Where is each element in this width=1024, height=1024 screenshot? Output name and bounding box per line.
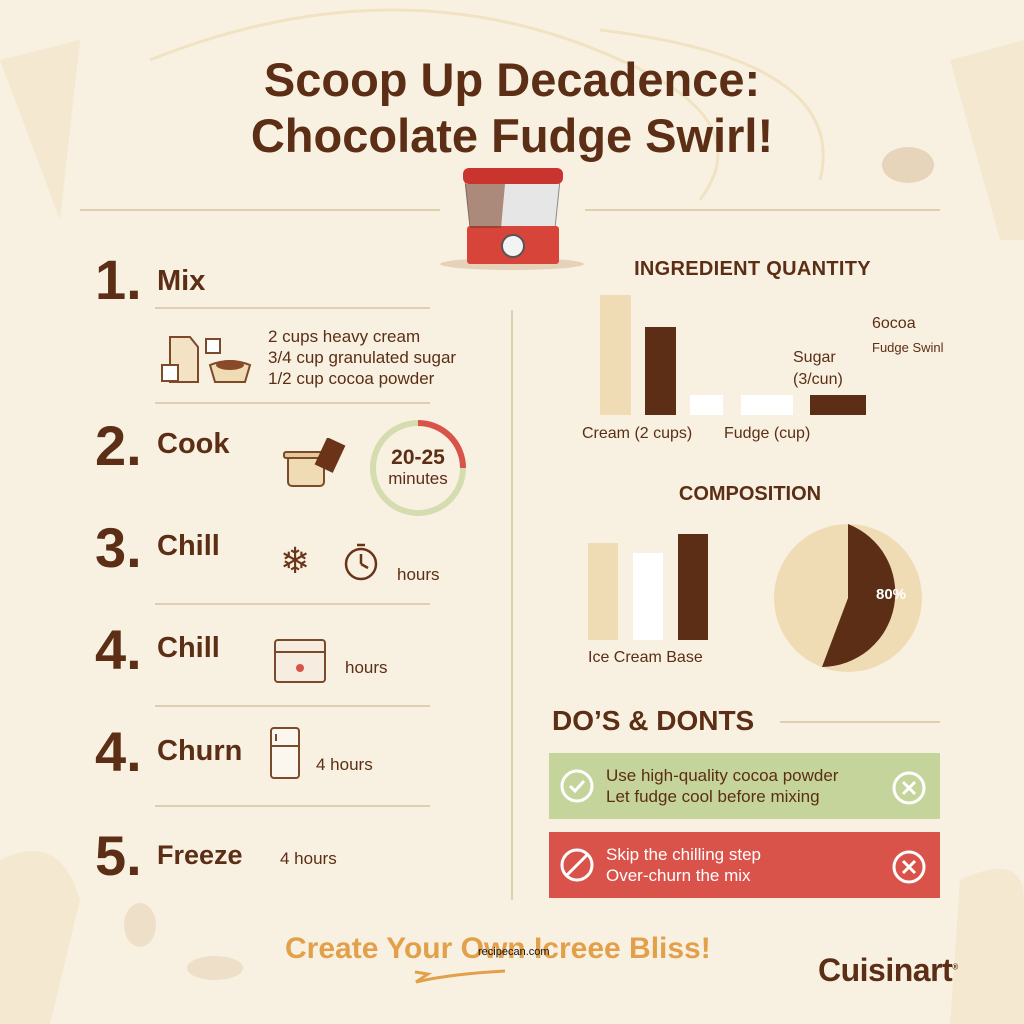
footer tagline: Create Your Own Icreee Bliss!: [285, 932, 711, 965]
title: [251, 53, 773, 162]
step 4 churn: 4 hours: [316, 755, 373, 774]
step 3 chill: [95, 516, 440, 584]
title: Scoop Up Decadence:: [264, 53, 760, 106]
step 2 cook: minutes: [388, 469, 448, 488]
composition chart: Ice Cream Base: [588, 649, 703, 666]
dont box: Skip the chilling step: [606, 845, 761, 864]
step 4 churn: Churn: [157, 735, 242, 767]
bar chart: ingredient quantity: Fudge Swinl: [872, 340, 944, 355]
text: recipecan.com: [478, 946, 550, 958]
bar chart: ingredient quantity: 6ocoa: [872, 315, 916, 332]
icon: ice cream maker: [440, 168, 584, 270]
icon: pot: [283, 438, 346, 487]
dos and donts heading: DO’S & DONTS: [552, 705, 754, 736]
step 1 mix: 1.: [95, 248, 142, 311]
pie chart: [774, 524, 922, 672]
step 5 freeze: [95, 824, 337, 887]
step 4 chill: Chill: [157, 632, 220, 664]
step 3 chill: Chill: [157, 530, 220, 562]
step 5 freeze: Freeze: [157, 840, 243, 870]
composition chart: COMPOSITION: [679, 483, 821, 505]
dont box: Over-churn the mix: [606, 866, 751, 885]
step 1 mix: 2 cups heavy cream: [268, 327, 420, 346]
do box: Use high-quality cocoa powder: [606, 766, 838, 785]
dont box: [549, 832, 940, 898]
step 5 freeze: 4 hours: [280, 849, 337, 868]
step 1 mix: Mix: [157, 265, 205, 297]
bar chart: ingredient quantity: Fudge (cup): [724, 425, 810, 442]
step 3 chill: hours: [397, 565, 440, 584]
step 1 mix: 3/4 cup granulated sugar: [268, 348, 456, 367]
icon: milk and sugar: [161, 336, 252, 383]
step 1 mix: 1/2 cup cocoa powder: [268, 369, 434, 388]
step 3 chill: 3.: [95, 516, 142, 579]
bar chart: ingredient quantity: INGREDIENT QUANTITY: [634, 258, 871, 280]
step 2 cook: 20-25: [391, 446, 445, 469]
bar chart: ingredient quantity: [582, 258, 944, 442]
timer ring: [370, 420, 466, 516]
step 1 mix: [95, 248, 456, 404]
bar chart: ingredient quantity: Cream (2 cups): [582, 425, 692, 442]
pie chart: 80%: [876, 586, 906, 603]
logo: Cuisinart®: [818, 952, 958, 988]
composition chart: [588, 483, 922, 672]
step 4 chill: 4.: [95, 618, 142, 681]
step 4 chill: hours: [345, 658, 388, 677]
do box: Let fudge cool before mixing: [606, 787, 820, 806]
bar chart: ingredient quantity: (3/cun): [793, 371, 843, 388]
step 3 chill: ❄: [280, 540, 310, 581]
step 4 chill: [95, 618, 388, 683]
step 2 cook: [95, 414, 466, 516]
icon: stopwatch: [344, 544, 378, 580]
step 2 cook: Cook: [157, 428, 230, 460]
bar chart: ingredient quantity: Sugar: [793, 349, 836, 366]
title: Chocolate Fudge Swirl!: [251, 109, 773, 162]
step 2 cook: 2.: [95, 414, 142, 477]
step 4 churn: [95, 720, 373, 783]
do box: [549, 753, 940, 819]
step 4 churn: 4.: [95, 720, 142, 783]
step 5 freeze: 5.: [95, 824, 142, 887]
